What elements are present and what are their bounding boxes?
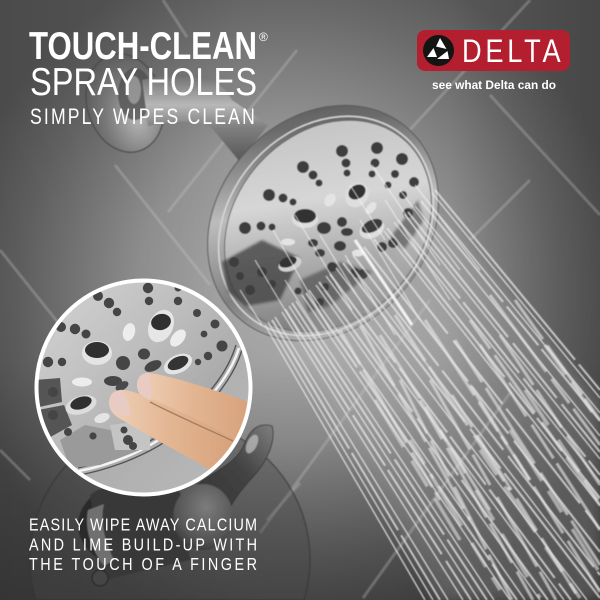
chrome rim (160, 58, 486, 388)
large holes (276, 178, 388, 275)
escutcheon (30, 419, 310, 600)
shower head (160, 58, 486, 388)
valve body (78, 483, 182, 567)
water spray (240, 165, 600, 600)
wall flange (75, 44, 175, 162)
inset circle: finger wiping spray holes (34, 278, 252, 496)
subtitle: SIMPLY WIPES CLEAN (30, 105, 255, 130)
caption: THE TOUCH OF A FINGER (29, 555, 257, 574)
spray inside head (240, 165, 480, 335)
registered mark: ® (259, 30, 268, 44)
dark chrome reflections (38, 378, 72, 437)
title (29, 25, 268, 130)
shower arm (142, 74, 268, 162)
blotchy broken streams (340, 295, 600, 600)
small holes (43, 283, 227, 450)
tagline: see what Delta can do (432, 80, 556, 92)
Delta logo (417, 30, 570, 92)
thin continuous streams (265, 193, 600, 600)
spray holes (229, 142, 419, 306)
title line: SPRAY HOLES: SPRAY HOLES (30, 61, 257, 104)
spray face (182, 78, 474, 374)
spray mist wash (290, 220, 600, 600)
caption (29, 515, 257, 574)
title line: TOUCH-CLEAN: TOUCH-CLEAN (29, 25, 257, 68)
fingers (109, 372, 248, 470)
lever (190, 425, 273, 522)
logo mark (423, 35, 454, 66)
inset spray face (39, 282, 222, 458)
knob (173, 484, 233, 550)
face rim stripes (78, 345, 242, 475)
large holes (63, 306, 195, 425)
shower valve: escutcheon, body, knob and lever (30, 419, 310, 600)
medium broken streams (272, 190, 600, 600)
red badge (417, 30, 570, 71)
screw (92, 570, 108, 586)
caption: EASILY WIPE AWAY CALCIUM (29, 515, 257, 535)
wordmark: DELTA (462, 34, 561, 70)
caption: AND LIME BUILD-UP WITH (29, 535, 257, 555)
dark reflections (222, 240, 300, 306)
